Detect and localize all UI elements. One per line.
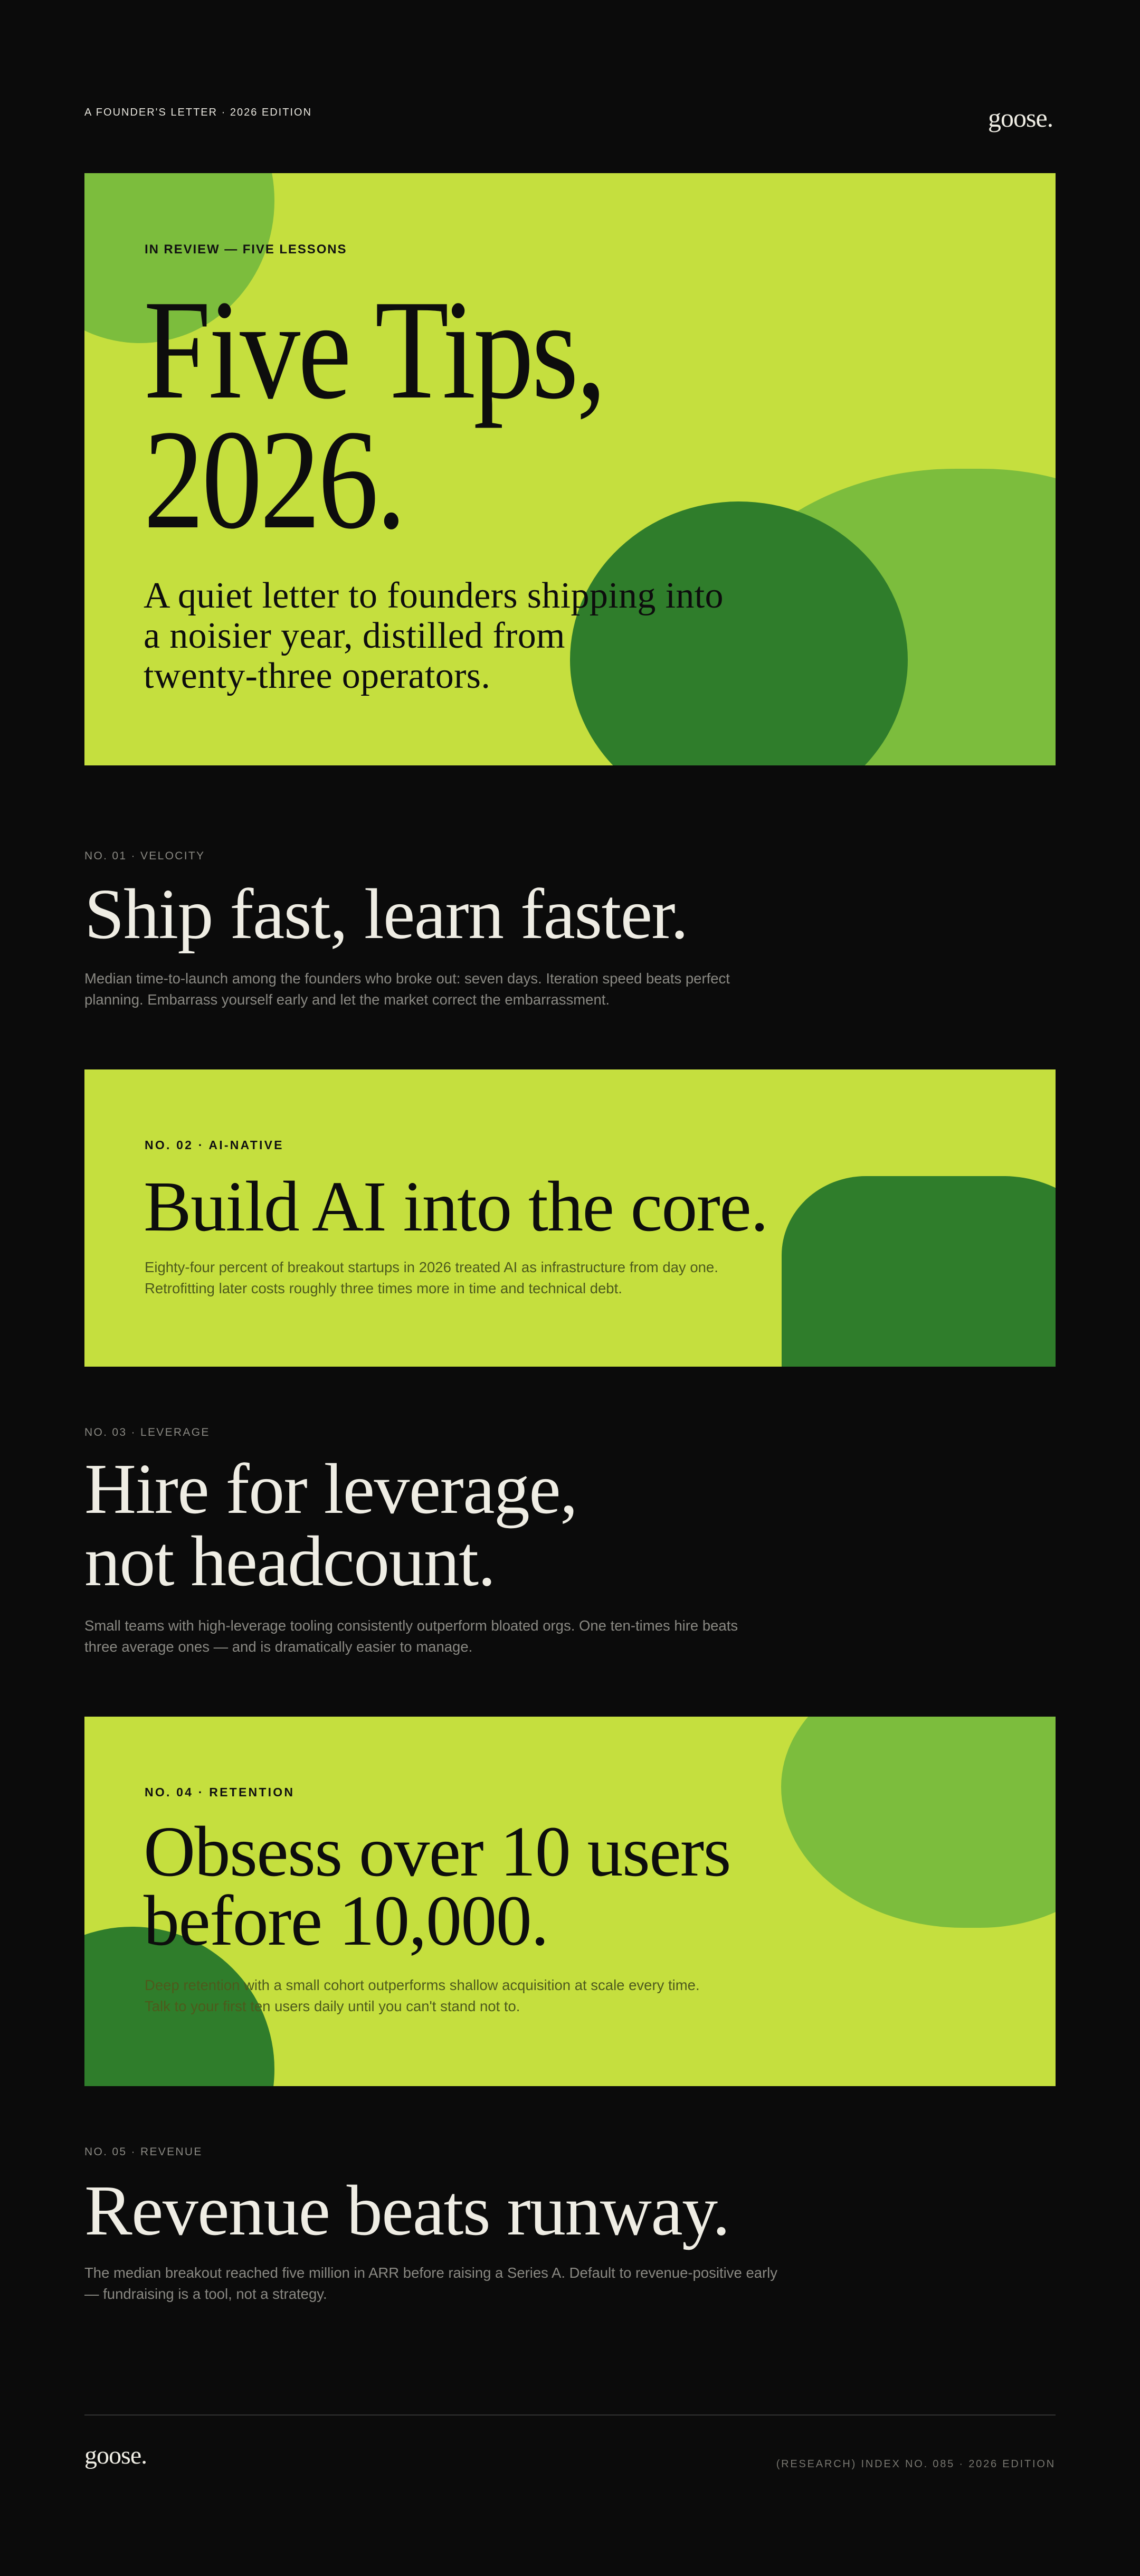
body [84, 970, 730, 1008]
label: NO. 03 · LEVERAGE [84, 1426, 210, 1438]
panel 2: AI-native [84, 1069, 1056, 1367]
body: three average ones — and is dramatically easier to manage. [84, 1639, 472, 1655]
hero subtitle: a noisier year, distilled from [144, 615, 565, 656]
body: Deep retention with a small cohort outperforms shallow acquisition at scale every time. [145, 1977, 700, 1993]
panel 4: retention [84, 1717, 1056, 2086]
body: Retrofitting later costs roughly three times more in time and technical debt. [145, 1280, 622, 1296]
section 1: velocity [84, 850, 730, 1008]
label: NO. 02 · AI-NATIVE [145, 1138, 284, 1152]
heading: Ship fast, learn faster. [84, 875, 688, 954]
label: NO. 04 · RETENTION [145, 1785, 294, 1799]
footer: index text: (RESEARCH) INDEX NO. 085 · 2026 EDITION [776, 2458, 1056, 2470]
label: NO. 05 · REVENUE [84, 2146, 203, 2158]
heading: Build AI into the core. [144, 1167, 767, 1246]
body: Eighty-four percent of breakout startups in 2026 treated AI as infrastructure from day one. [145, 1259, 718, 1275]
body: Median time-to-launch among the founders who broke out: seven days. Iteration speed beats perfect [84, 970, 730, 987]
hero title: Five Tips, [144, 271, 604, 429]
heading: not headcount. [84, 1522, 495, 1601]
blob: top-left light green [5, 58, 274, 343]
hero subtitle: A quiet letter to founders shipping into [144, 575, 724, 616]
header: logo: goose. [988, 103, 1053, 132]
heading: Obsess over 10 users [144, 1812, 730, 1891]
hero subtitle [144, 575, 724, 696]
body: The median breakout reached five million in ARR before raising a Series A. Default to revenue-positive early [84, 2265, 777, 2281]
hero title: 2026. [144, 401, 404, 558]
body: planning. Embarrass yourself early and let the market correct the embarrassment. [84, 991, 610, 1008]
body: — fundraising is a tool, not a strategy. [84, 2286, 327, 2302]
body: Small teams with high-leverage tooling consistently outperform bloated orgs. One ten-times hire beats [84, 1617, 738, 1634]
header: kicker: A FOUNDER'S LETTER · 2026 EDITION [84, 107, 312, 118]
body [145, 1259, 718, 1296]
blob: dark green [782, 1176, 1109, 1440]
hero title [144, 271, 604, 558]
heading: Revenue beats runway. [84, 2171, 729, 2250]
body [84, 1617, 738, 1655]
section 3: leverage [84, 1426, 738, 1655]
blob: dark green [570, 501, 908, 818]
heading [144, 1812, 730, 1961]
body: Talk to your first ten users daily until you can't stand not to. [145, 1998, 520, 2014]
blob: right light green [691, 469, 1140, 944]
section 5: revenue [84, 2146, 777, 2302]
hero subtitle: twenty-three operators. [144, 656, 490, 696]
body [145, 1977, 700, 2014]
panel: hero [84, 173, 1056, 765]
body [84, 2265, 777, 2302]
heading: Hire for leverage, [84, 1450, 577, 1529]
heading: before 10,000. [144, 1881, 548, 1961]
blob: light green top right [781, 1659, 1129, 1928]
blob: dark green bottom left [0, 1927, 274, 2212]
label: NO. 01 · VELOCITY [84, 850, 205, 862]
hero label: IN REVIEW — FIVE LESSONS [145, 242, 347, 257]
footer: logo: goose. [84, 2441, 147, 2469]
heading [84, 1450, 577, 1601]
